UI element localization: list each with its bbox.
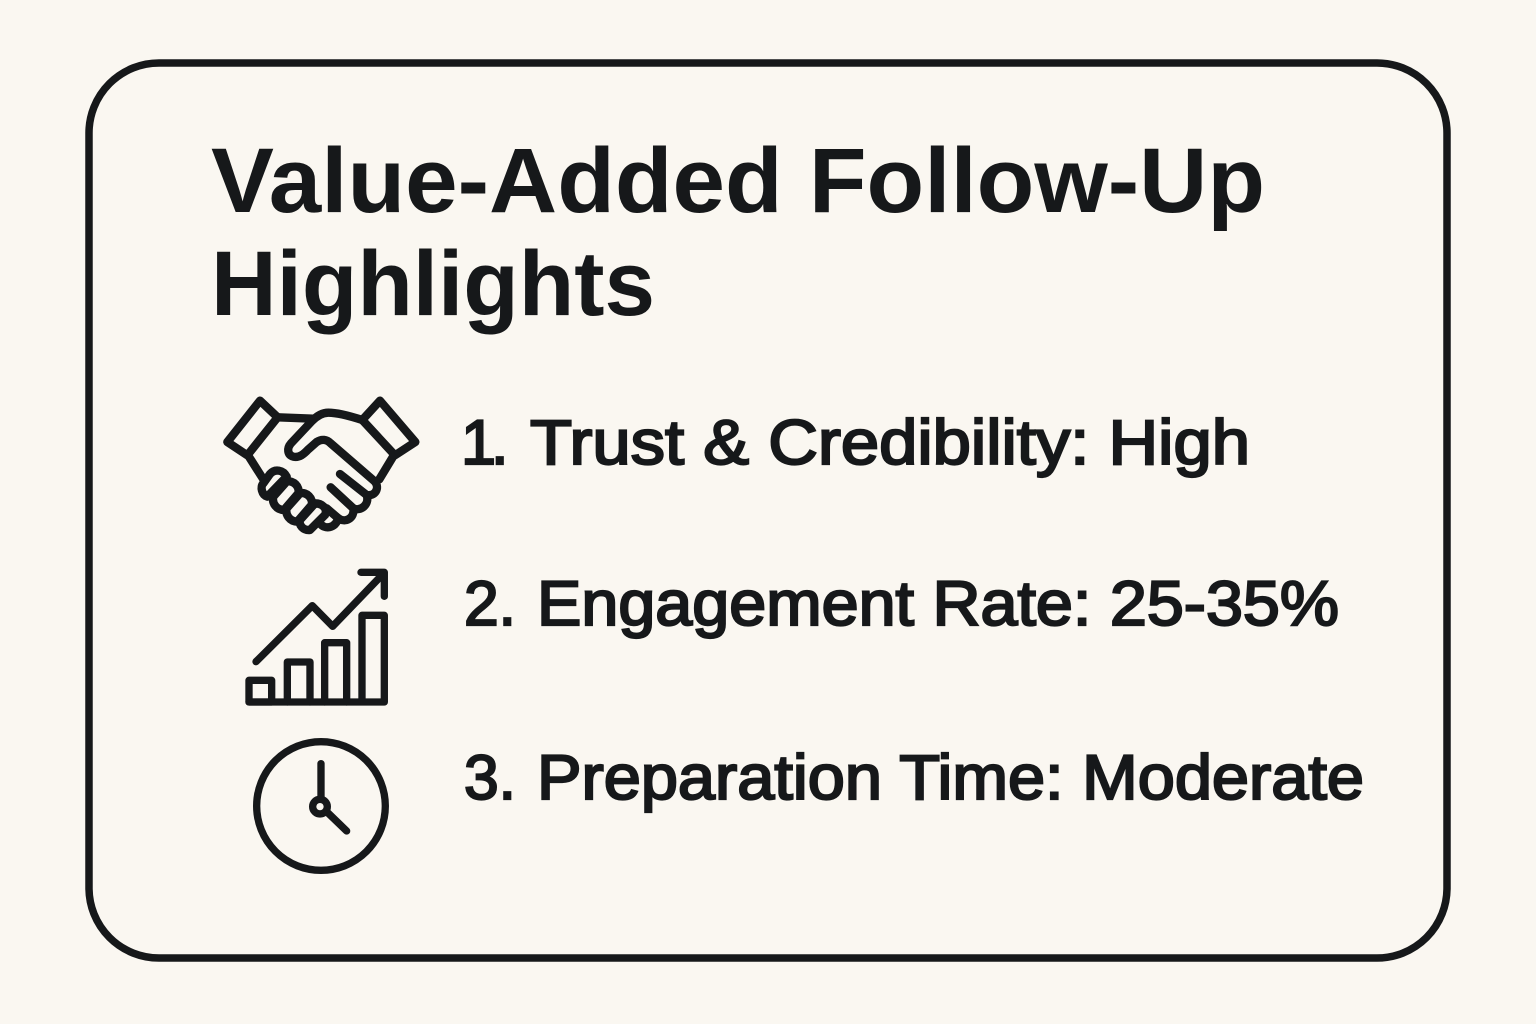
icon: handshake	[227, 401, 415, 530]
item 1 text: .	[491, 408, 509, 478]
item 3 text: 3.	[464, 743, 516, 813]
title: Highlights	[211, 233, 655, 335]
icon: bar chart with rising arrow	[249, 572, 384, 702]
item 1 text: 1	[461, 408, 496, 478]
item 2 text: 2.	[464, 569, 516, 639]
title	[211, 130, 1265, 335]
item 1 text: Trust & Credibility: High	[530, 408, 1250, 478]
item 3 text: Preparation Time: Moderate	[537, 743, 1364, 813]
title: Value-Added Follow-Up	[211, 130, 1265, 232]
panel: rounded card outline	[89, 63, 1447, 958]
icon: clock	[257, 742, 385, 870]
item 2 text: Engagement Rate: 25-35%	[537, 569, 1339, 639]
